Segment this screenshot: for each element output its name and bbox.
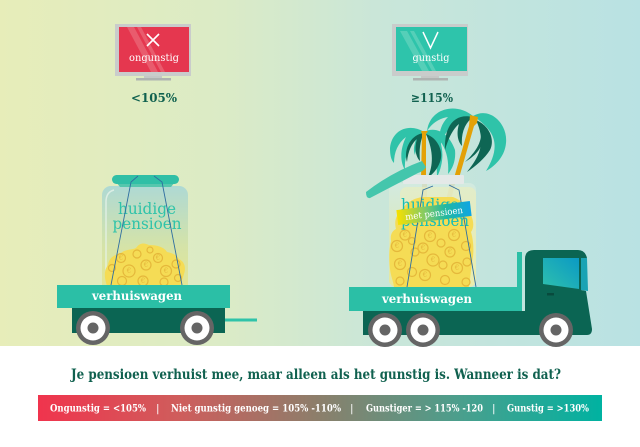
- coins: €: [427, 232, 432, 240]
- coin pile: €: [143, 261, 148, 269]
- jar with palm trees and pension: [389, 175, 476, 287]
- legend bar: Ongunstig = <105%: [50, 402, 146, 414]
- coins: €: [430, 256, 435, 264]
- legend bar: |: [350, 402, 354, 416]
- jar lid: [112, 175, 179, 187]
- ribbon: met pensioen: met pensioen: [405, 206, 464, 223]
- open jar lid: [366, 161, 426, 198]
- legend bar: |: [156, 402, 160, 416]
- coin pile: €: [163, 267, 168, 275]
- coins: €: [447, 248, 452, 256]
- heading: at least 115 percent: ≥115%: [411, 90, 453, 105]
- coins: [389, 197, 473, 287]
- coin pile: €: [118, 254, 123, 262]
- truck: verhuiswagen: verhuiswagen: [381, 292, 472, 306]
- trailer: verhuiswagen: [57, 285, 257, 345]
- truck: verhuiswagen: [349, 250, 592, 347]
- legend bar: Niet gunstig genoeg = 105% -110%: [171, 402, 341, 414]
- icon: green monitor, gunstig: gunstig: [412, 53, 450, 64]
- cab window: [543, 258, 579, 289]
- coins: €: [454, 264, 459, 272]
- coins: €: [451, 231, 456, 239]
- icon: green monitor, gunstig: [392, 24, 468, 80]
- white jar neck: [403, 175, 464, 184]
- heading: below 105 percent: <105%: [131, 90, 177, 105]
- jar label: pensioen: [112, 214, 182, 233]
- jar label: huidige: [401, 195, 459, 214]
- coins: €: [420, 244, 425, 252]
- jar: huidige pensioen: [102, 175, 188, 296]
- icon: red monitor, ongunstig: ongunstig: [129, 53, 180, 64]
- legend bar: Gunstiger = > 115% -120: [366, 402, 483, 414]
- wheel: [180, 311, 214, 345]
- wheel: [368, 313, 402, 347]
- palm trees: [390, 109, 506, 200]
- coin pile: €: [140, 277, 145, 285]
- coin pile: €: [126, 267, 131, 275]
- icon: red monitor, ongunstig: [115, 24, 191, 80]
- jar label: huidige: [118, 199, 176, 218]
- large palm dark fronds: [445, 116, 473, 150]
- trailer: verhuiswagen: verhuiswagen: [91, 289, 182, 303]
- legend bar: [38, 395, 602, 421]
- coin pile: [105, 243, 185, 286]
- straps: [111, 176, 182, 285]
- large palm teal fronds: [473, 113, 506, 171]
- legend bar: Gunstig = >130%: [507, 402, 589, 414]
- wheel: [76, 311, 110, 345]
- trunks: [421, 131, 428, 178]
- background panel: [0, 0, 640, 346]
- jar label: pensioen: [401, 211, 469, 230]
- coins: €: [397, 260, 402, 268]
- coins: €: [394, 242, 399, 250]
- wheel: [406, 313, 440, 347]
- question heading: Je pensioen verhuist mee, maar alleen als het gunstig is. Wanneer is dat?: [69, 367, 561, 383]
- coin pile: €: [155, 254, 160, 262]
- jar label: [112, 199, 182, 233]
- coins: €: [402, 231, 407, 239]
- coins: €: [422, 271, 427, 279]
- small palm teal fronds: [390, 128, 424, 170]
- straps: [407, 185, 476, 287]
- small palm dark fronds: [406, 133, 424, 162]
- legend bar: |: [492, 402, 496, 416]
- jar label: [401, 195, 469, 230]
- wheel: [539, 313, 573, 347]
